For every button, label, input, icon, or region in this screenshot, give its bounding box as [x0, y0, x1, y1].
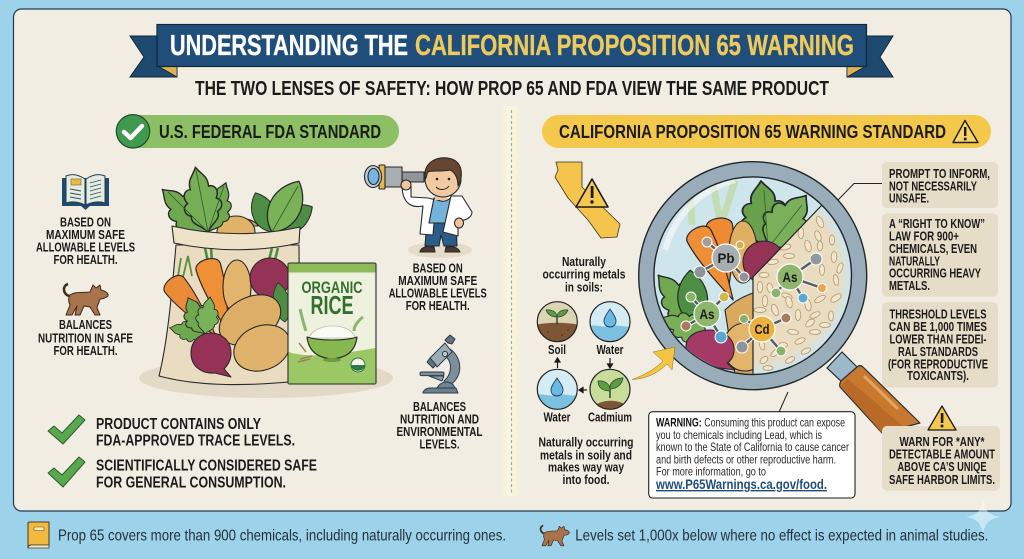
note: right to know: LAW FOR 900+ [889, 230, 959, 244]
note: right to know: OCCURRING HEAVY [889, 267, 981, 281]
carrots [178, 256, 192, 277]
warning label box: For more information, go to [656, 465, 766, 479]
text: based on maximum safe levels (left): BASED ON [60, 216, 111, 230]
subtitle: THE TWO LENSES OF SAFETY: HOW PROP 65 AND FDA VIEW THE SAME PRODUCT [195, 78, 829, 100]
lens dividing lines [753, 205, 822, 377]
note: right to know: NATURALLY [889, 254, 940, 268]
text: based on maximum safe levels (right): BASED ON [413, 261, 463, 275]
lens left half: vegetables [658, 180, 808, 374]
icon: water [588, 302, 632, 345]
cycle labels: Cadmium [588, 411, 632, 425]
handle [827, 352, 920, 433]
molecule: arsenic As left: As [700, 306, 715, 322]
note: right to know: A “RIGHT TO KNOW” [889, 217, 985, 231]
cycle labels: Water [596, 343, 624, 357]
icon: water lower [536, 368, 578, 410]
text: metals make way into food: into food. [562, 473, 610, 487]
bag cuff [172, 226, 300, 250]
text: based on maximum safe levels (right): MAXIMUM SAFE [398, 274, 477, 288]
icon: soil [536, 301, 578, 342]
warning label box: WARNING: Consuming this product can expose [656, 416, 845, 430]
molecule: cadmium Cd: Cd [754, 321, 770, 337]
note: threshold levels: TOXICANTS). [907, 369, 969, 383]
rice package [288, 263, 376, 384]
footer: book note: Prop 65 covers more than 900 chemicals, including naturally occurring ones. [58, 528, 506, 545]
checklist item 1: FDA-APPROVED TRACE LEVELS. [96, 433, 295, 450]
warning label box [649, 392, 855, 498]
note: threshold levels: CAN BE 1,000 TIMES [889, 320, 987, 334]
warning label box: known to the State of California to cause cancer [656, 440, 849, 454]
note: warn for any detectable amount [882, 426, 1000, 491]
note: right to know: METALS. [889, 279, 930, 293]
note: threshold levels: LOWER THAN FEDEI- [890, 332, 986, 346]
magnifying glass [639, 162, 920, 433]
icon: warning triangle [953, 120, 978, 142]
cycle labels [544, 343, 632, 425]
beet bottom [191, 333, 231, 377]
molecule: lead Pb [694, 237, 749, 282]
molecule: cadmium Cd [736, 313, 791, 356]
heading: Prop 65 pill [542, 115, 991, 148]
icon: dog small [541, 526, 569, 546]
icon: California map with warning [555, 162, 620, 238]
text: balances nutrition and environmental levels: LEVELS. [420, 438, 460, 452]
heading: FDA standard pill [116, 115, 399, 148]
icon: cadmium sprout [589, 368, 631, 410]
text: balances nutrition and environmental levels: BALANCES [413, 400, 466, 414]
text: based on maximum safe levels (left) [36, 216, 135, 267]
title text: CALIFORNIA PROPOSITION 65 WARNING [415, 30, 854, 62]
bag body [159, 245, 300, 385]
text: balances nutrition and environmental levels: NUTRITION AND [400, 412, 479, 426]
beet leaves [168, 318, 207, 344]
lens [654, 177, 852, 375]
text: based on maximum safe levels (left): MAXIMUM SAFE [46, 228, 125, 242]
warning label box: and birth defects or other reproductive harm. [656, 452, 836, 466]
lens ring [646, 169, 859, 382]
text: naturally occurring metals in soils [542, 255, 626, 295]
footer: book note [28, 522, 506, 548]
rice package: RICE [310, 290, 354, 320]
text: naturally occurring metals in soils: Naturally [562, 255, 606, 269]
text: naturally occurring metals in soils: in soils: [565, 281, 603, 295]
center divider [500, 106, 522, 496]
checklist item 2: FOR GENERAL CONSUMPTION. [96, 474, 286, 491]
text: balances nutrition (left): FOR HEALTH. [54, 344, 118, 358]
note: right to know: CHEMICALS, EVEN [889, 242, 977, 256]
note: prompt to inform [882, 162, 998, 208]
icon: warning triangle over note [928, 406, 956, 430]
text: balances nutrition (left): BALANCES [59, 318, 112, 332]
icon: dog [64, 284, 108, 315]
cycle labels: Water [544, 411, 571, 425]
cycle arrows [555, 358, 612, 392]
molecule: lead Pb: Pb [718, 250, 734, 266]
checklist item 1: PRODUCT CONTAINS ONLY [96, 416, 262, 433]
checklist item 1 [48, 415, 295, 450]
molecule: arsenic As left [681, 292, 729, 343]
note: threshold levels [882, 302, 998, 388]
arrow: cycle to magnifier [632, 347, 675, 380]
illustration: grocery bag with vegetables [139, 164, 393, 398]
icon: microscope [420, 335, 460, 393]
icon: green check badge [116, 115, 150, 148]
callout line to first note [838, 184, 882, 200]
molecule: arsenic As right [771, 253, 826, 303]
note: threshold levels: THRESHOLD LEVELS [890, 307, 986, 321]
note: threshold levels: (FOR REPRODUCTIVE [888, 357, 988, 371]
note: prompt to inform: PROMPT TO INFORM, [889, 167, 990, 181]
text: based on maximum safe levels (right): ALLOWABLE LEVELS [389, 286, 487, 300]
text: balances nutrition (left): NUTRITION IN SAFE [38, 332, 133, 346]
title banner [130, 24, 893, 77]
cycle labels: Soil [548, 343, 566, 357]
text: based on maximum safe levels (left): FOR HEALTH. [54, 253, 118, 267]
text: naturally occurring metals in soils: occurring metals [542, 267, 626, 281]
text: based on maximum safe levels (left): ALLOWABLE LEVELS [36, 241, 135, 255]
checklist item 2 [48, 457, 317, 491]
diagram: soil-water-cadmium cycle [535, 302, 632, 425]
note: warn for any detectable amount: ABOVE CA’S UNIQE [898, 460, 986, 474]
beet top [250, 258, 290, 298]
sparkle mark [966, 500, 1000, 534]
checklist item 2: SCIENTIFICALLY CONSIDERED SAFE [96, 458, 317, 475]
text: metals make way into food: makes way way [548, 461, 624, 475]
text: metals make way into food [538, 436, 634, 487]
text: based on maximum safe levels (right) [389, 261, 487, 313]
rice package: ORGANIC [302, 278, 362, 297]
lens glare [665, 180, 735, 250]
heading: FDA standard pill: U.S. FEDERAL FDA STANDARD [159, 121, 381, 142]
warning label box: you to chemicals including Lead, which is [656, 428, 822, 442]
text: balances nutrition and environmental levels: ENVIRONMENTAL [396, 425, 483, 439]
text: balances nutrition and environmental levels [396, 400, 483, 452]
icon: open book [62, 175, 109, 210]
text: metals make way into food: Naturally occurring [538, 436, 634, 450]
icon: scientist with telescope [364, 158, 472, 258]
icon: yellow book [28, 522, 49, 548]
leaves [150, 164, 319, 245]
note: prompt to inform: NOT NECESSARILY [889, 180, 977, 194]
note: prompt to inform: UNSAFE. [889, 192, 929, 206]
text: metals make way into food: metals in soily and [540, 448, 632, 462]
title text: UNDERSTANDING THE [170, 30, 408, 62]
molecule: arsenic As right: As [782, 269, 798, 285]
note: threshold levels: RAL STANDARDS [898, 345, 978, 359]
note: warn for any detectable amount: WARN FOR *ANY* [900, 435, 985, 449]
potatoes [210, 284, 290, 356]
text: balances nutrition (left) [38, 318, 133, 358]
text: based on maximum safe levels (right): FOR HEALTH. [406, 299, 470, 313]
lens right half: rice [754, 208, 848, 372]
note: right to know [882, 213, 998, 297]
warning label box: www.P65Warnings.ca.gov/food. [655, 476, 827, 492]
heading: Prop 65 pill: CALIFORNIA PROPOSITION 65 WARNING STANDARD [559, 121, 946, 142]
